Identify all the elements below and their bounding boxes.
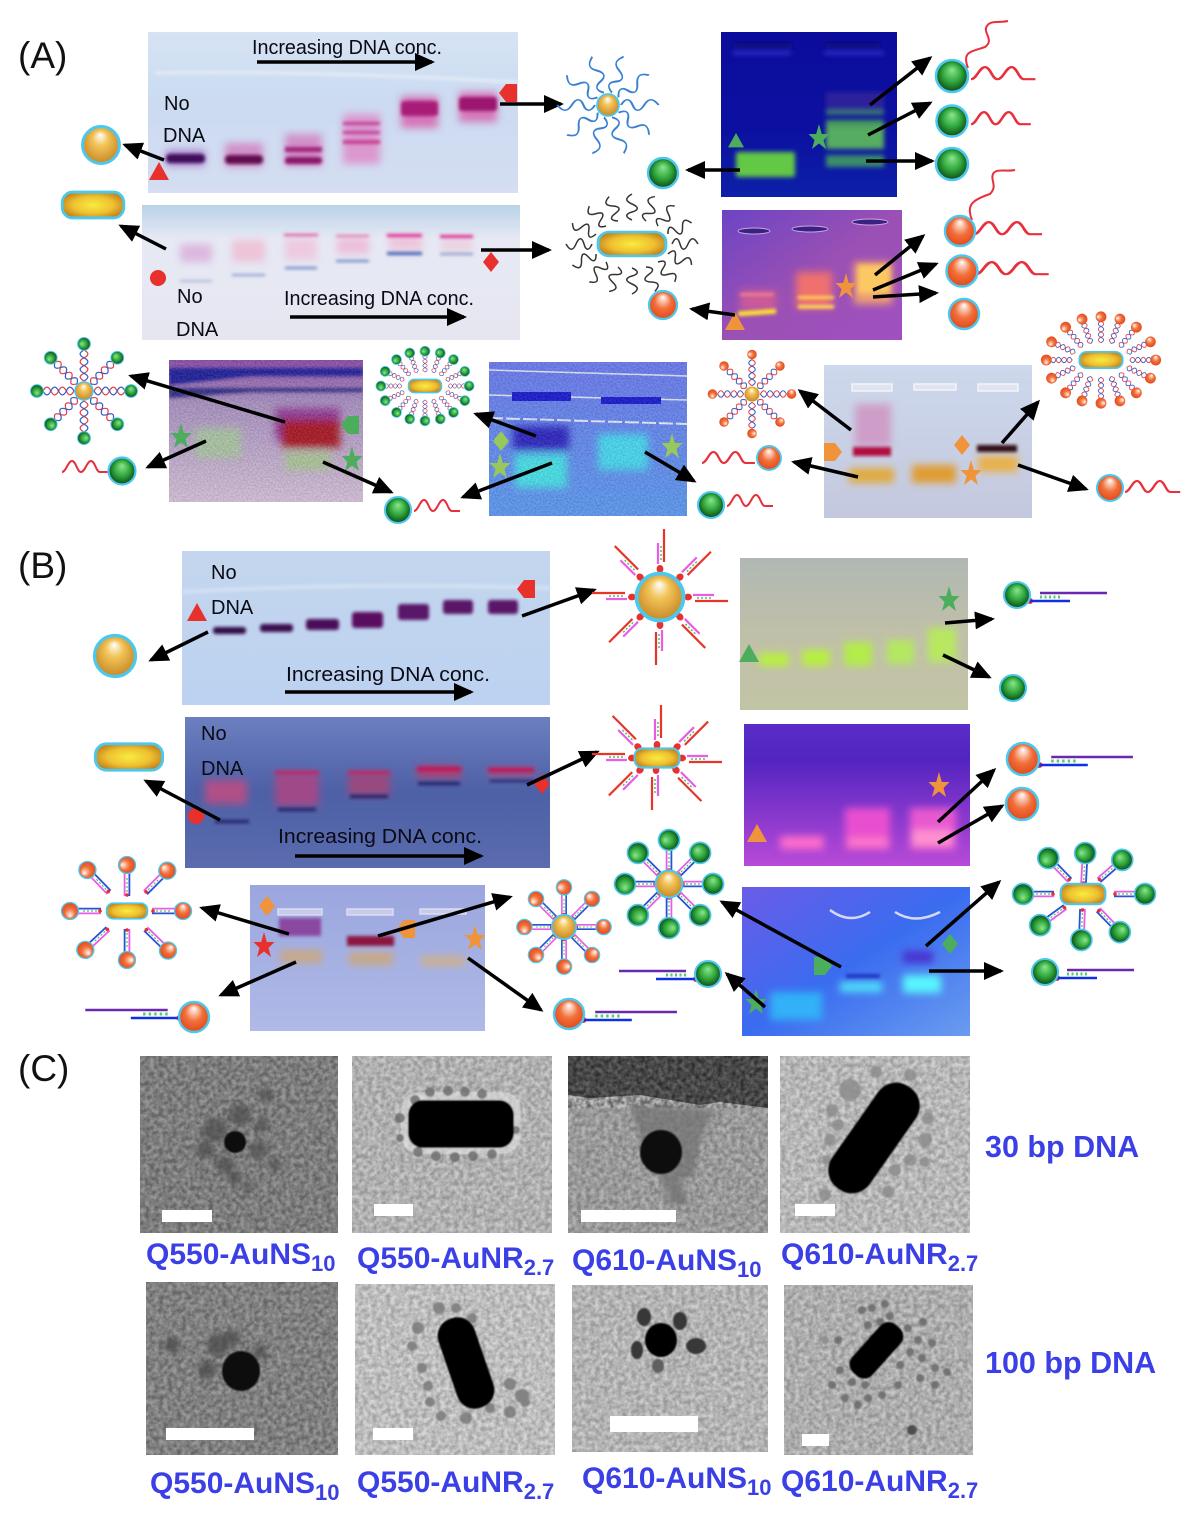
marker: red pentagon [517, 580, 535, 598]
marker: green star [808, 124, 830, 149]
icon: gold nanorod with black ssDNA [566, 194, 698, 294]
icon: green QD with DNA [698, 492, 773, 518]
marker: green diamond [942, 934, 958, 954]
panel: A gel, AuNS with increasing DNA [148, 32, 518, 193]
icon: AuNR with orange QD arms [62, 856, 192, 968]
icon: AuNR ring with orange QD [1041, 311, 1161, 409]
icon: gold nanosphere with blue ssDNA [557, 55, 659, 155]
icon: AuNS star with green QD [31, 338, 137, 444]
marker: red pentagon [499, 84, 517, 102]
icon: green QD [936, 148, 968, 180]
panel: A gel, Q550 AuNS assembly [169, 360, 363, 502]
caption: Q610-AuNS10: Q610-AuNS [572, 1244, 737, 1277]
icon: orange QD [649, 291, 677, 319]
gel label: increasing DNA conc: Increasing DNA conc. [286, 664, 490, 686]
panel: B gel, AuNS with 100 bp DNA [182, 551, 550, 705]
panel: A fluorescent gel, orange QD [722, 210, 902, 340]
gel label: No DNA [176, 286, 219, 341]
panel: A gel, AuNR with increasing DNA [142, 205, 520, 341]
icon: green QD duplex [619, 961, 721, 987]
icon: green QD with DNA [385, 497, 460, 523]
panel: B gel, AuNR with 100 bp DNA [185, 717, 550, 868]
marker: light green star [490, 453, 510, 478]
caption: Q550-AuNR2.7: 2.7 [524, 1479, 554, 1504]
caption: 100 bp DNA: 100 bp DNA [985, 1346, 1156, 1380]
marker: orange pentagon [824, 443, 842, 461]
gel label: No DNA: DNA [176, 319, 219, 341]
icon: AuNR with green QD arms [1012, 842, 1156, 951]
marker: red triangle [149, 162, 169, 180]
marker: green star [938, 586, 960, 611]
TEM image: Q610-AuNR2.7, 30 bp [780, 1056, 970, 1233]
icon: orange QD [949, 299, 979, 329]
marker: orange pentagon [397, 920, 415, 938]
marker: red triangle [187, 603, 207, 621]
caption: Q610-AuNS10: Q610-AuNS [582, 1462, 747, 1495]
icon: orange QD with one DNA strand [946, 256, 1049, 286]
caption: Q550-AuNR2.7: Q550-AuNR [357, 1466, 524, 1499]
icon: AuNS with orange QD arms [517, 880, 611, 974]
marker: green pentagon [341, 416, 359, 434]
marker: red diamond [483, 252, 499, 272]
gel label: No DNA [163, 93, 206, 147]
arrows: panel B pointers [146, 590, 1002, 1010]
gel label: increasing DNA conc: Increasing DNA conc. [252, 37, 442, 59]
icon: green QD with DNA [62, 458, 136, 484]
icon: orange QD duplex [85, 1002, 209, 1032]
gel label: increasing DNA conc: Increasing DNA conc. [284, 288, 474, 310]
caption: Q610-AuNS10: 10 [737, 1257, 762, 1282]
icon: gold nanorod [62, 192, 124, 218]
icon: orange QD [1006, 788, 1038, 820]
marker: green star [170, 423, 192, 448]
icon: AuNR ring with green QD [376, 346, 474, 426]
marker: orange star [960, 460, 982, 485]
gel label: No DNA [201, 723, 244, 780]
marker: red circle [150, 270, 166, 286]
marker: orange star [836, 273, 856, 298]
marker: orange triangle [747, 824, 767, 842]
TEM image: Q610-AuNR2.7, 100 bp [784, 1285, 973, 1455]
icon: green QD [1000, 675, 1026, 701]
gel label: increasing DNA conc: Increasing DNA conc. [278, 826, 482, 848]
panel: B gel, Q610 assemblies [250, 885, 485, 1031]
marker: red diamond [534, 774, 550, 794]
caption: Q610-AuNR2.7: 2.7 [948, 1478, 978, 1503]
panel: B fluorescent gel, green QD [740, 558, 968, 710]
marker: green pentagon [814, 957, 832, 975]
caption: Q550-AuNS10: Q550-AuNS [146, 1238, 311, 1271]
heading: panel B: (B) [18, 545, 67, 586]
TEM image: Q550-AuNS10, 30 bp [140, 1056, 338, 1233]
icon: gold nanosphere [94, 636, 136, 676]
icon: gold nanorod [95, 744, 163, 770]
marker: red circle [188, 808, 204, 824]
marker: orange star [928, 772, 950, 797]
icon: AuNS star with orange QD [708, 350, 796, 438]
caption: Q550-AuNS10: 10 [311, 1251, 336, 1276]
panel: A fluorescent gel, green QD [721, 32, 897, 197]
icon: orange QD duplex [1007, 743, 1133, 775]
gel label: No DNA: DNA [163, 125, 206, 147]
icon: AuNS with spiked duplex linkers [592, 529, 728, 665]
icon: AuNR with spiked duplex linkers [592, 705, 722, 810]
marker: orange star [464, 925, 486, 950]
marker: green triangle [739, 644, 759, 662]
icon: green QD [648, 158, 678, 188]
panel: B gel, Q550 assemblies [742, 887, 970, 1036]
marker: orange diamond [954, 435, 970, 455]
gel label: No DNA: No [201, 723, 227, 745]
caption: Q610-AuNR2.7: 2.7 [948, 1251, 978, 1276]
gel label: No DNA: DNA [211, 597, 254, 619]
arrow: increasing DNA [295, 854, 481, 858]
icon: orange QD duplex [554, 999, 677, 1029]
caption: Q550-AuNS10: 10 [315, 1480, 340, 1505]
marker: red star [254, 932, 274, 957]
icon: orange QD with DNA [702, 446, 781, 470]
icon: green QD duplex [1004, 582, 1107, 608]
caption: Q550-AuNS10: Q550-AuNS [150, 1467, 315, 1500]
arrow: increasing DNA [285, 690, 471, 694]
icon: green QD with two DNA strands [936, 21, 1035, 92]
marker: orange diamond [259, 896, 275, 916]
gel label: No DNA: No [177, 286, 203, 308]
caption: Q610-AuNR2.7: Q610-AuNR [781, 1238, 948, 1271]
arrow: increasing DNA [290, 315, 464, 319]
marker: light green diamond [493, 431, 509, 451]
gel label: No DNA: DNA [201, 758, 244, 780]
TEM image: Q610-AuNS10, 100 bp [572, 1285, 768, 1452]
gel label: No DNA: No [211, 562, 237, 584]
arrow: increasing DNA [257, 60, 432, 64]
panel: A gel, Q550 AuNR assembly [489, 362, 687, 516]
marker: green star [342, 446, 362, 471]
marker: light green star [662, 433, 682, 458]
TEM image: Q550-AuNR2.7, 30 bp [352, 1056, 552, 1233]
icon: orange QD with two DNA strands [945, 170, 1042, 246]
panel: A gel, Q610 assemblies [824, 365, 1032, 518]
caption: 30 bp DNA: 30 bp DNA [985, 1130, 1139, 1164]
caption: Q610-AuNR2.7: Q610-AuNR [781, 1465, 948, 1498]
icon: green QD duplex [1032, 959, 1134, 985]
heading: panel A: (A) [18, 35, 67, 76]
arrows: panel A pointers [121, 58, 1086, 497]
TEM image: Q550-AuNS10, 100 bp [146, 1282, 338, 1455]
icon: gold nanosphere [82, 126, 120, 164]
caption: Q610-AuNS10: 10 [747, 1475, 772, 1500]
heading: panel C: (C) [18, 1048, 69, 1089]
gel label: No DNA: No [164, 93, 190, 115]
caption: Q550-AuNR2.7: 2.7 [524, 1255, 554, 1280]
marker: orange triangle [725, 312, 745, 330]
icon: green QD with one DNA strand [936, 106, 1031, 136]
caption: Q550-AuNR2.7: Q550-AuNR [357, 1242, 524, 1275]
panel: B fluorescent gel, orange QD [744, 724, 970, 866]
TEM image: Q610-AuNS10, 30 bp [568, 1056, 768, 1233]
gel label: No DNA [211, 562, 254, 619]
TEM image: Q550-AuNR2.7, 100 bp [355, 1284, 555, 1455]
marker: green triangle [728, 133, 744, 147]
icon: orange QD with DNA [1097, 475, 1180, 501]
icon: AuNS with green QD arms [614, 830, 724, 938]
marker: green star [746, 989, 766, 1014]
